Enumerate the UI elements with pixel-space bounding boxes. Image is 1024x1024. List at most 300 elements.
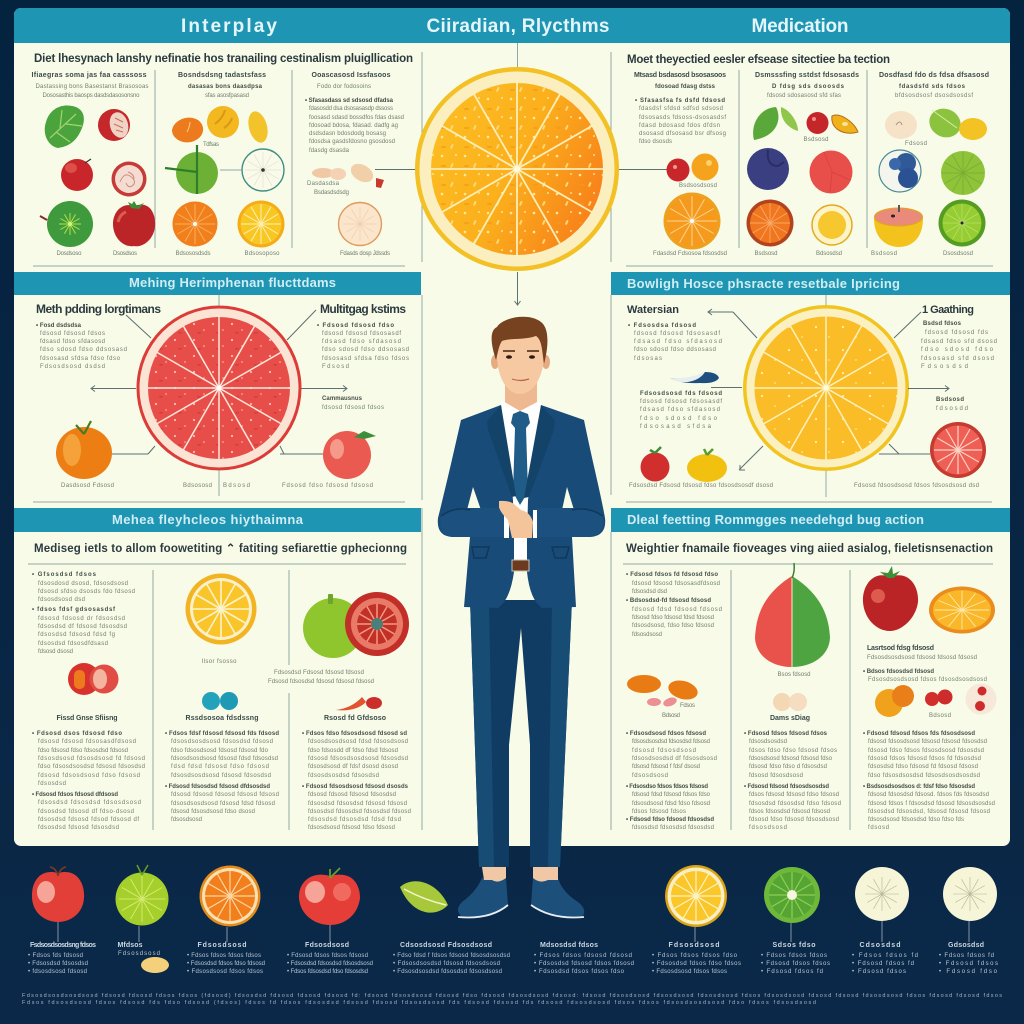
text block: fdsosasd sfdsa (640, 424, 712, 430)
text block: fdsosdsosd fdsosdsosd fd fdsosd (38, 756, 145, 762)
fruit labels: Bsdsosd (754, 251, 778, 257)
text block: • Bdsosdsd-fd fdsosd fdsosd (626, 598, 711, 604)
legend titles: Fsdsosdsosdsng fdsos (30, 942, 96, 949)
legend text: • Fdsos fdsos fdsosd fdsosd (534, 953, 632, 959)
jacket (438, 405, 605, 608)
icon: orange slice (664, 192, 720, 250)
fruit labels: Bdsosdsd (816, 251, 842, 257)
text block: fdsosdsd fdso fdsosd fd fdsosd fdsosd (868, 764, 978, 770)
icon: apple 2 (299, 868, 360, 942)
labels (61, 483, 373, 489)
label: Rsosd fd Gfdsoso (324, 715, 386, 722)
legend titles: Sdsos fdso (772, 942, 816, 949)
text block: fdsosd (868, 825, 889, 831)
text block: fdsosd fdsos fdsosd fdsos fd fdsosdsd (868, 756, 981, 762)
labels: Fdsos (680, 703, 695, 709)
text block (626, 572, 722, 638)
text block: fdasosdd dsa dsosasasdp dssoss (309, 106, 393, 112)
legend text: • Fdsos fdsos fdsos fdso (652, 953, 738, 959)
section header: mid right (611, 272, 1010, 295)
text block: fdsosd fdsosd fdsosasdf (634, 331, 720, 337)
legend text: • Fdsosdsosd fdsos fdsos (652, 969, 727, 975)
icon: red circle (810, 150, 852, 194)
section header: lower right: Dleal feetting Rommgges needehgd bug action (627, 512, 924, 527)
bottom strip (22, 865, 1002, 1006)
text block: • Fdsos fdso fdsosdsosd fdsosd sd (302, 731, 407, 737)
text block: dsdsdasn bdosdodg bosasg (309, 131, 386, 137)
text block: fdsosdsosd (749, 825, 787, 831)
text block: fdsosdsd fdsosdfdsasd (38, 641, 108, 647)
icon: melon bowl (874, 205, 923, 247)
legend text: • Fdsosd fdsos fdsos fdsosd (287, 953, 368, 959)
column headings (32, 72, 391, 99)
legend text: • Fdsosdsd fdsos fdsos fdso (534, 969, 625, 975)
text block: • Fdsosd fdsos fd fdsosd fdso (626, 572, 718, 578)
legend titles: Mfdsos (118, 942, 143, 949)
text block (32, 731, 145, 831)
icon: orange pills (627, 675, 700, 708)
text block: fdsos fdsosd fdsos (632, 809, 686, 815)
legend text: • Fdsos fdsosdsd fdso fdsosdsd (287, 969, 368, 975)
text block: • Fdsosd fdso fdsosd fdsosdsd (626, 817, 714, 823)
legend text: • Fdsosdsd fdsos fdso fdsos (652, 961, 741, 967)
text block: fdsosd fdsosdsosd fdso fdsosd (38, 773, 140, 779)
column headings: fdosoad fdasg dstss (655, 84, 716, 90)
text block: • Fdsosdsa fdsosd (628, 323, 696, 329)
legend text: • Fdso fdsd f fdsos fdsosd fdsosdsosdsd (393, 953, 510, 959)
icon: pale fruit with red seeds (966, 684, 996, 714)
legend titles: Mdsosdsd fdsos (540, 942, 598, 949)
text block: Lasrtsod fdsg fdsosd (867, 645, 934, 652)
text block: fdsosd fdso fdsos fdsosdsosd fdsosdsd (868, 748, 984, 754)
text block: fdsosdsosd fdsd fdso fdsosd (632, 801, 710, 807)
text block: fdsosd fdsosd fdsosd fdsosd fdsosd (171, 792, 279, 798)
icon: green fruit (165, 145, 218, 194)
text block: fdsosasd sfdsa fdso fdso (40, 356, 121, 362)
text block: fdsosdsd fdsosdsd fdsosdsosd (38, 800, 141, 806)
text block (921, 321, 997, 370)
legend text (28, 951, 998, 975)
grapefruit (136, 306, 302, 470)
legend text: • Fdsosdsosd fdsos fdsos (187, 969, 263, 975)
icon: grapefruit (930, 422, 986, 478)
text block: Bsdsosd (936, 397, 964, 403)
text block (863, 645, 987, 683)
legend titles: Cdsosdsosd Fdsosdsosd (400, 942, 492, 949)
legend text: • fdsosdsosd fdsosd (28, 969, 87, 975)
icon: orange pair (875, 685, 914, 717)
labels: Bdsososd (183, 483, 212, 489)
label: Dams sDiag (770, 715, 810, 722)
lemon (743, 305, 909, 471)
text block (322, 396, 384, 411)
text block: fdso sdosd fdso ddsosasd (634, 347, 716, 353)
neck (505, 380, 537, 412)
text block: fdsosasds fdsoss-dsosasdsf (639, 115, 726, 121)
panel: top right (617, 54, 993, 266)
legend text: • Fdsosd fdsos (939, 961, 998, 967)
text block: fdsosdsd fdsosd fdsosdsd (38, 825, 119, 831)
label: Bsos fdsosd (778, 672, 810, 678)
labels (629, 483, 979, 489)
text block: • Fdsosd fdsosdsd fdsosd dfdsosdsd (165, 784, 270, 790)
legend text: • Fdsosd fdsos fdsos (761, 961, 830, 967)
icon: lime slice (764, 867, 820, 942)
label: Meth pdding lorgtimans (36, 302, 161, 316)
fruit labels: Dsosdsosd (943, 251, 973, 257)
text block: fdsosd fdsosdsd fdsosd. fdsos fds fdsosdsd (868, 792, 989, 798)
text block: fdsosd fdso fdso d fdsosdsd (749, 764, 827, 770)
icon: yellow oval (245, 109, 271, 145)
legend text: • Fdsos fdsos fdsos fdsos (187, 953, 261, 959)
icon: half red half green pear (755, 563, 830, 667)
head (491, 317, 550, 394)
column headings: Dososasthis baosps dasdsdasosonsno (42, 93, 140, 99)
text block: fdsos fdsosd fdsosd fdso fdsosd (749, 792, 839, 798)
text block: Cammausnus (322, 396, 363, 402)
icon: beige pills (773, 693, 807, 711)
legend titles: Fdsosdsosd (305, 942, 349, 949)
text block: fdsosdsd fdsosdsd fdsosdsd fdsosd (308, 809, 411, 815)
legend text: • Fdsosdsd fdsosdsd fdsosdsosd (287, 961, 373, 967)
labels: Dasdsosd Fdsosd (61, 483, 114, 489)
icon: dark orange (746, 200, 794, 246)
text block: fdsosas (634, 356, 662, 362)
text block (165, 731, 279, 823)
text block: foosasd sdasd bossdfos fdas dsasd (309, 115, 404, 121)
text block: fdsosdsosdsosd fdsd fdsosdsosd (308, 739, 408, 745)
text block: Fdsosdsosdsosd fdsosd fdsosd fdsosd (867, 655, 977, 661)
tie (511, 411, 530, 505)
text block: • Bdsos fdsosdsd fdsosd (863, 669, 934, 675)
hands (499, 501, 533, 538)
fruit labels (56, 251, 390, 257)
labels: Dasdasdsa (307, 181, 340, 187)
icon: leaf (400, 881, 448, 913)
text block: • Gfsosdsd fdsos (32, 572, 97, 578)
legend text: • Fdsosdsosdsd fdsosdsd fdsosdsosd (393, 969, 502, 975)
fruit labels: Fdasds dosp Jdssds (340, 251, 390, 257)
text block: fdsosdsosdsd (749, 739, 787, 745)
icon: pink cut fruit (112, 162, 146, 196)
legend text: • Fdsosd fdsos fd (852, 961, 914, 967)
text block: fdasdg dsasda (309, 148, 350, 154)
text block: fdsosd fdsosdsosd fdso dsosd (171, 809, 255, 815)
label: 1 Gaathing (922, 304, 974, 316)
column headings: Ifiaegras soma jas faa casssoss (32, 72, 147, 79)
text block: fdsosd dsosd (38, 649, 73, 655)
text block: fdsosdsosdsd df fdsosdsosd (632, 756, 717, 762)
icon: red apple (863, 566, 918, 631)
text block: fdsosasd sfd dsosd (921, 356, 994, 362)
footnote (22, 993, 1002, 1006)
text block: fdsosd fdsosd fdsosasdfdsosd (38, 739, 136, 745)
column headings: D fdsg sds dsoosds (772, 84, 845, 90)
label: Bsdsosdsosd (679, 183, 717, 189)
text block: fdso dsosds (639, 139, 672, 145)
panel: lower right (623, 543, 996, 831)
text block: fdso sdosd fdso ddsosasd (40, 347, 127, 353)
main panel (14, 8, 1010, 846)
icon: green citrus (40, 201, 93, 247)
column headings: Mtsasd bsdasosd bsosasoos (634, 72, 726, 79)
panel: lower left (28, 542, 411, 831)
person (438, 317, 605, 917)
text block (744, 731, 841, 831)
text block (36, 323, 127, 370)
text block: fdsosd sfdso dsosds fdo fdsosd (38, 589, 135, 595)
text block: Fdsosdsd (921, 364, 968, 370)
legend titles: Fdsosdsosd (668, 942, 720, 949)
text block: fdsosd fdsosd fdsosasdf (640, 399, 722, 405)
panel: mid right (626, 295, 997, 502)
fruit labels: Bdsososdsds (176, 251, 210, 257)
icon: pale slice (885, 111, 917, 139)
text block: fdsasd fdso sfdasosd (640, 407, 720, 413)
panel: top left (32, 53, 417, 266)
text block: fdsosdosd dsosd, fdsosdsosd (38, 581, 128, 587)
title bar (181, 16, 848, 37)
icon: red apple (323, 431, 376, 479)
text block: Fdsosd (322, 364, 349, 370)
icon: cherry and orange (617, 154, 718, 182)
legend text: • Fdsos fdsos fd (939, 953, 994, 959)
labels: Fdsosd fdso fdsosd fdsosd (282, 483, 373, 489)
icon: white slice (220, 149, 284, 191)
text block: fdsosdsosd df fdsf dsosd dsosd (308, 764, 398, 770)
text block: fdsosdsosd (171, 817, 202, 823)
text block: fdsosdsosd dsd (38, 597, 85, 603)
text block: fdosdsa gasdsfdosno gsosdosd (309, 139, 395, 145)
icon: lime and red fruit (303, 592, 409, 658)
text block: fdsasd fdso sfdasosd (40, 339, 105, 345)
text block (626, 731, 717, 831)
text block: fdsosd fdsd fdsosd fdsos fdso (632, 792, 711, 798)
text block: fdsosdsosdsd fdsosdsd (308, 773, 379, 779)
label: Tdfsas (203, 142, 219, 148)
legend titles: Gdsosdsd (948, 942, 984, 949)
arrows (708, 295, 949, 497)
text block: • fdsos fdsf gdsosasdsf (32, 607, 116, 613)
icon: plum (747, 148, 789, 190)
text block: fdsosdsd fdsosdsd fdso fdsosd (749, 801, 841, 807)
label: Fissd Gnse Sfiisng (56, 715, 118, 722)
text block: fdsosdsosdsosd fdsosd fdsd fdsosdsd (171, 756, 278, 762)
text block (640, 391, 722, 430)
text block: fdsosd fdsosdsosdsosd fdsosdsd (308, 756, 408, 762)
text block: fdso sdosd fdso (921, 347, 994, 353)
labels: Fdsosdsd Fdsosd fdsosd fdso fdsosdsosdf dsosd (629, 483, 773, 489)
legend titles: Fdsosdsosd (198, 942, 246, 949)
text block: • Sfasasdass sd sdsosd dfadsa (305, 98, 394, 104)
section header: mid left: Mehing Herimphenan flucttdams (129, 275, 336, 290)
text block: Fdsosd fdsosdsd fdsosd fdsosd fdsosd (268, 679, 374, 685)
text block: fdsosdsosd fdsosd fdsosd fdso (749, 756, 833, 762)
column headings: Bosndsdsng tadastsfass (178, 72, 266, 79)
column headings: fdasdsfd sds fdsos (899, 84, 966, 90)
text block: fdso fdsosdsosdsd fdsosd fdsosdsd (38, 764, 145, 770)
labels: Bdsosd (662, 713, 680, 719)
icon: chili peppers (336, 697, 382, 710)
text block: fdsosdsd fdsosd fdsod fdsosd df (38, 817, 139, 823)
section header: mid right: Bowligh Hosce phsracte resetbale Ipricing (627, 276, 900, 291)
text block: • Fdsos fdsf fdsosd fdsosd fds fdsosd (165, 731, 279, 737)
column headings: bfdsosdsosf dsosdsosdsf (895, 93, 973, 99)
text block: fdsosd fdsosd f fdsf dsosd (632, 764, 700, 770)
legend text: • Fdsos fdsos fdsos (761, 953, 827, 959)
text block: fdso fdsosdd df fdso fdsd fdsosd (308, 748, 398, 754)
fruit labels (754, 141, 973, 257)
text block: fdsosd fdsosd fdsos (40, 331, 105, 337)
text block: fdasdsf sfdsd sdfsd sdsosd (639, 106, 723, 112)
text block: fdsosdsosdsosd fdsosdsd fdsosd (171, 739, 273, 745)
text block: • Fdsosdsosd fdsos fdsosd (626, 731, 706, 737)
icon: blueberry slice (879, 150, 921, 192)
label: Bdsosd (929, 713, 951, 719)
column headings: sfas asosfpasasd (205, 93, 249, 99)
heading: Diet lhesynach lanshy nefinatie hos tranailing cestinalism pluigllication (34, 53, 413, 65)
icon: green citrus (941, 151, 985, 195)
fruit labels: Fdsosd (905, 141, 927, 147)
legend text: • Fdsosdsosdsd fdsosd fdsosdsosd (393, 961, 500, 967)
text block: fdsosdsd df fdsosd fdsosdsd (38, 624, 127, 630)
section header: lower left: Mehea fleyhcleos hiythaimna (112, 512, 304, 527)
text block: Fdsosdsosd fds fdsosd (640, 391, 722, 397)
column headings: Dosdfasd fdo ds fdsa dfsasosd (879, 72, 989, 79)
section header: lower left (14, 508, 421, 532)
section header: lower right (611, 508, 1010, 532)
heading: Moet theyectied eesler efsease sitectiee ba tection (627, 54, 890, 66)
labels: Fdsosd fdsosdsosd fdsos fdsosdsosd dsd (854, 483, 979, 489)
labels: Bdsosd (223, 483, 250, 489)
icon: white slice 2 (943, 867, 997, 942)
text block: • Fdsosdso fdsos fdsos fdsosd (626, 784, 708, 790)
text block: fdsosdsosdsosd fdsosd fdsd fdsosd (171, 801, 275, 807)
label: Bsdsosd (804, 137, 828, 143)
text block: • Fdsosd fdsosdsosd fdsosd dsosds (302, 784, 409, 790)
title bar: Medication (752, 16, 848, 37)
text block: fdso sdosd fdso ddsosasd (322, 347, 409, 353)
text block: fdsosd fdsosdsosd (749, 773, 803, 779)
icon: peach slice (338, 202, 382, 246)
text block: fdso fdsosdsosdsd fdsosdsosdsosdsd (868, 773, 980, 779)
text block (863, 731, 995, 831)
text block: • Fdsosd fdsosd fdsos fds fdsosdsosd (863, 731, 975, 737)
title bar: Ciiradian, Rlycthms (426, 16, 610, 37)
text block: fdsosd fdsosd fds (925, 330, 988, 336)
legend text: • Fdsosdsd fdsos fdso fdsosd (187, 961, 265, 967)
belt (512, 560, 529, 571)
label: Multitgag kstims (320, 302, 406, 316)
text block: fdsosdsd dsd (632, 589, 667, 595)
text block: fdsosd fdsosd fdsosasdfdsosd (632, 581, 720, 587)
icon: orange (56, 421, 112, 479)
text block: fdsosd fdsos f fdsosdsd fdsosd fdsosdsosdsd (868, 801, 995, 807)
footnote: Fdsos fdsosdsosd fdsos fdsosd fds fdso fdsosd (fdsos) fdsos fd fdsos fdsosdsd fdsosd fdsosd fdsosdsosd fds fdsosd fdsosd fds fdsosd fdsosdsosd fdsos fdsos fdsosdsosdsosd fdso fdsos fdsosdsosd (22, 1000, 816, 1006)
text block: fdsosdsd (38, 781, 66, 787)
legend text: • Fdsosd fdso (939, 969, 998, 975)
icon: orange slice (200, 866, 260, 942)
icon: lemon slice (186, 574, 256, 644)
text block: fdasd bdosasd fdos dfdsn (639, 123, 720, 129)
legend text: • Fdsos fdsos fd (852, 953, 918, 959)
text block: fdsasd fdso sfd dsosd (921, 339, 997, 345)
text block: fdsosdsosd fdsosdsd fdso fdso fds (868, 817, 964, 823)
text block: fdsosd fdsd fdsosd fdsosd (632, 607, 722, 613)
icon: yellow tomato (687, 449, 727, 482)
icon: lemon slice (665, 865, 727, 942)
text block (268, 670, 374, 685)
heading: Weightier fnamaile fioveages ving aiied asialog, fieletisnsenaction (626, 543, 993, 555)
text block: fdsosd fdso fdsosd fdsd fdsosd (632, 615, 714, 621)
text block: Fdsosdsosdsosd fdsos fdsosdsosdsosd (868, 677, 987, 683)
column headings: Ooascasosd Issfasoos (312, 72, 391, 79)
text block: fdsosdsd fdsosdsd fdsosdsd (632, 825, 714, 831)
icon: orange slice oval (929, 586, 995, 634)
text block: • Bsdsosdsosdsos d: fdsf fdso fdsosdsd (863, 784, 975, 790)
text block: Fdsosdsosd dsdsd (40, 364, 105, 370)
icon: green citrus (116, 865, 168, 942)
heading: Mediseg ietls to allom foowetiting ⌃ fatiting sefiarettie gphecionng (34, 542, 407, 555)
text block: fdsosd fdsosd fdsosasdf (322, 331, 401, 337)
text block: fdso fdsosdsosd fdsosd fdsosd fdo (171, 748, 269, 754)
text block: fdsosdsosdsosd fdsosd fdsosdsd (171, 773, 271, 779)
text block: fdsosd fdsosd fdsos (322, 405, 384, 411)
title bar: Interplay (181, 16, 277, 37)
icon: white slice 1 (855, 867, 909, 942)
icon: red apple (113, 201, 155, 246)
text block: fdsosd fdsosdsosd (632, 748, 696, 754)
text block: • Fdsosd fdsosd fdsosdsosdsd (744, 784, 829, 790)
column headings: dasasas bons daasdpsa (188, 84, 263, 90)
legend text: Fdsosdsosd (118, 951, 160, 957)
icon: pill (141, 957, 169, 973)
text block: fdsosdsosdsd fdsosdsd fdsosd (632, 739, 710, 745)
fruit labels: Dosdsoso (56, 251, 82, 257)
text block (936, 397, 968, 412)
text block: fdsosasd sfdsa fdso fdsos (322, 356, 409, 362)
text block: • Fdsosd fdsosd fdso (317, 323, 394, 329)
labels (307, 181, 349, 196)
text block: fdsosdsosd (632, 632, 662, 638)
text block: fdsosdsosd (632, 773, 668, 779)
section header: mid left (14, 272, 421, 295)
label: Rssdsosoa fdsdssng (186, 715, 258, 722)
icon: cherries (925, 690, 952, 706)
column headings: Dsmsssfing sstdst fdsosasds (755, 72, 859, 79)
labels: Bsdasdsdsdg (314, 190, 349, 196)
column headings: Fodo dor fodosoins (317, 84, 371, 90)
icon: yellow round (207, 106, 239, 138)
column headings: fdsosd sdosasosd sfd sfas (767, 93, 841, 99)
labels (662, 703, 695, 719)
text block: fdsd fdsd fdsosd fdso fdsosd (171, 764, 269, 770)
text block (317, 323, 409, 370)
legend text: • Fdsos fds fdsosd (28, 953, 83, 959)
legend text: • Fdsosd fdsos fd (761, 969, 823, 975)
text block: • Sfasasfsa fs dsfd fdsosd (635, 98, 725, 104)
panel: mid left (33, 295, 409, 502)
text block: fdsosdsd fdsosdsd fdsosd fdsosd (308, 801, 407, 807)
column headings: Dastassing bons Basestanst Brasosoas (36, 84, 148, 90)
icon: shoe (670, 372, 719, 383)
text block: fdsosd fdsosd dr fdsosdsd (38, 616, 125, 622)
text block: fdsosdsosd, fdso fdso fdsosd (632, 623, 714, 629)
icon: cherry (806, 112, 828, 134)
text block: fdosoad bdosa, fdasad. dadfg ag (309, 123, 398, 129)
text block: fdso sdosd fdso (640, 416, 718, 422)
text block: fdsosd fdsosdsosd fdsosd fdsosd fdsosdsd (868, 739, 987, 745)
